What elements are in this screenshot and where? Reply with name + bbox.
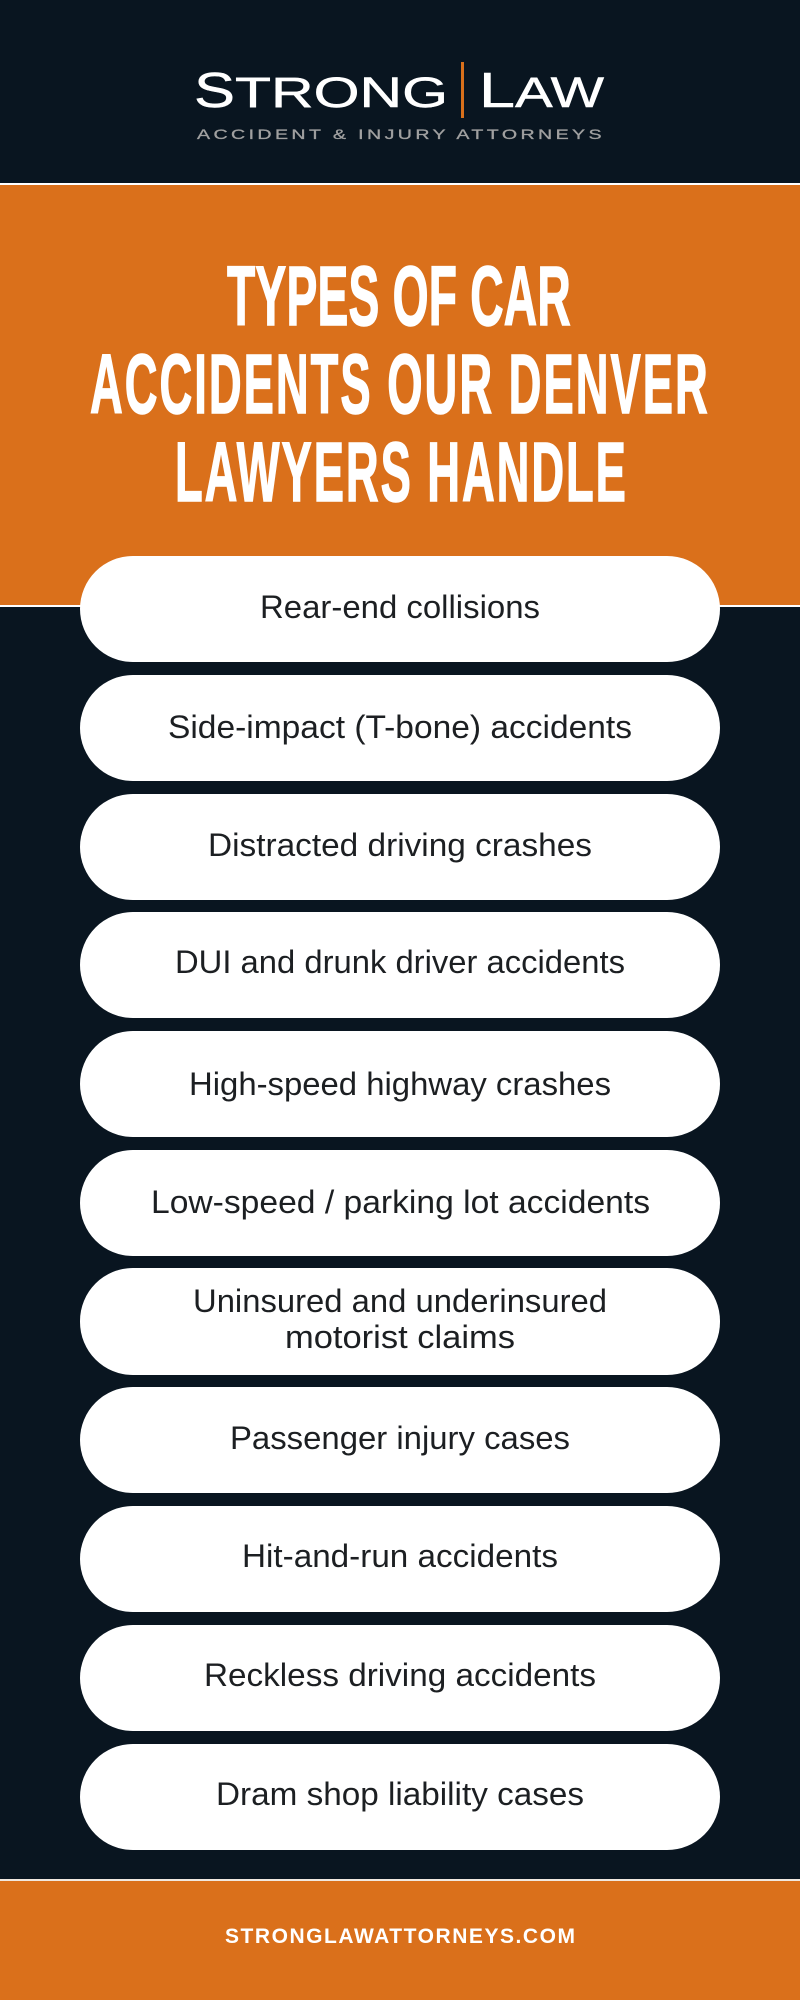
pill: distracted driving: Distracted driving crashes <box>208 827 592 863</box>
pill: DUI <box>80 912 720 1018</box>
pill: reckless: Reckless driving accidents <box>204 1657 596 1693</box>
logo: AW <box>515 70 604 117</box>
pill: passenger <box>80 1387 720 1493</box>
pill: distracted driving <box>80 794 720 900</box>
pill: uninsured <box>80 1268 720 1375</box>
title: TYPES OF CAR <box>227 251 571 344</box>
logo: S <box>194 63 235 118</box>
pill: side-impact accidents <box>80 675 720 781</box>
pill: passenger: Passenger injury cases <box>230 1420 570 1456</box>
pill: high-speed <box>80 1031 720 1137</box>
logo: ACCIDENT & INJURY ATTORNEYS <box>197 127 602 142</box>
pill: low-speed: Low-speed / parking lot accidents <box>151 1184 650 1220</box>
footer <box>0 1879 800 2000</box>
pill: uninsured: motorist claims <box>285 1319 515 1355</box>
title: ACCIDENTS OUR DENVER <box>90 338 708 432</box>
title: LAWYERS HANDLE <box>175 426 626 520</box>
logo: L <box>479 63 515 118</box>
pill: rear-end collisions <box>80 556 720 662</box>
pill: uninsured: Uninsured and underinsured <box>193 1283 607 1319</box>
logo: TRONG <box>235 70 448 117</box>
pill: hit-and-run <box>80 1506 720 1612</box>
pill: dram shop: Dram shop liability cases <box>216 1776 584 1812</box>
pill: low-speed <box>80 1150 720 1256</box>
pill: high-speed: High-speed highway crashes <box>189 1066 611 1102</box>
title panel <box>0 183 800 607</box>
pill: rear-end collisions: Rear-end collisions <box>260 589 540 625</box>
title <box>90 251 708 520</box>
list of accident types <box>80 556 720 1850</box>
logo <box>194 62 604 142</box>
footer: STRONGLAWATTORNEYS.COM <box>225 1925 575 1948</box>
pill: dram shop <box>80 1744 720 1850</box>
pill: reckless <box>80 1625 720 1731</box>
pill: DUI: DUI and drunk driver accidents <box>175 944 625 980</box>
pill: side-impact accidents: Side-impact (T-bone) accidents <box>168 709 632 745</box>
pill: hit-and-run: Hit-and-run accidents <box>242 1538 558 1574</box>
